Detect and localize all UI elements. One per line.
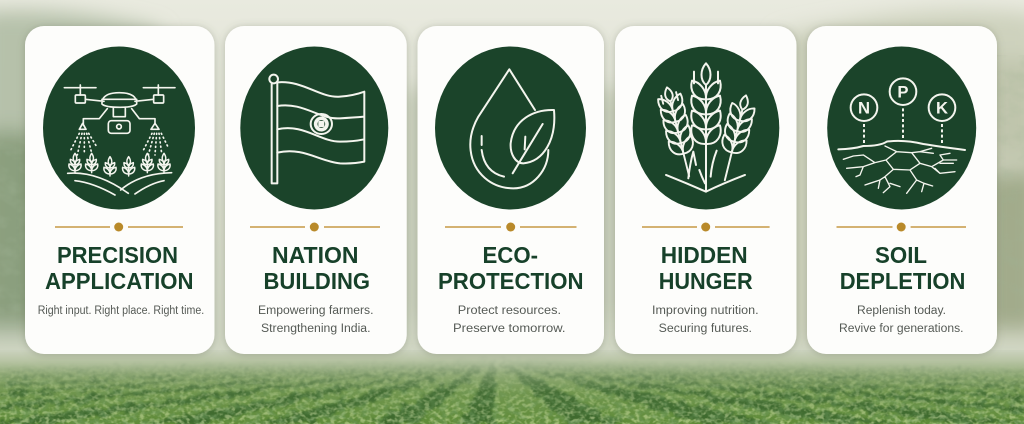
icon: waving Indian flag bbox=[240, 46, 388, 210]
heading: eco-protection: ECO- bbox=[482, 242, 538, 268]
icon: NPK over cracked soil: P bbox=[897, 83, 909, 102]
divider: gold rule and dot bbox=[250, 222, 380, 232]
text: eco tagline bbox=[453, 305, 566, 335]
text: hunger tagline: Improving nutrition. bbox=[652, 305, 759, 317]
icon: wheat stalks bbox=[633, 46, 779, 210]
text: soil tagline: Replenish today. bbox=[857, 305, 946, 317]
heading: precision application: APPLICATION bbox=[45, 268, 194, 294]
icon: NPK over cracked soil: N bbox=[858, 99, 870, 118]
icon: NPK over cracked soil: K bbox=[936, 99, 948, 118]
text: soil tagline: Revive for generations. bbox=[839, 323, 964, 335]
panel: nation building bbox=[225, 26, 407, 354]
panel: eco-protection bbox=[418, 26, 604, 354]
heading: eco-protection bbox=[438, 242, 584, 294]
dark furrows between crop rows bbox=[0, 358, 1024, 424]
divider: gold rule and dot bbox=[836, 222, 966, 232]
heading: eco-protection: PROTECTION bbox=[438, 268, 584, 294]
text: nation tagline: Empowering farmers. bbox=[258, 305, 374, 317]
heading: precision application bbox=[45, 242, 194, 294]
panel: hidden hunger bbox=[615, 26, 796, 354]
divider: gold rule and dot bbox=[642, 222, 770, 232]
heading: nation building: NATION bbox=[272, 242, 358, 268]
heading: precision application: PRECISION bbox=[57, 242, 178, 268]
icon: water drop with leaf bbox=[435, 46, 586, 210]
icon: drone spraying crops bbox=[43, 46, 195, 210]
panel: precision application bbox=[25, 26, 214, 354]
text: eco tagline: Protect resources. bbox=[458, 305, 561, 317]
panel: soil depletion bbox=[807, 26, 997, 354]
divider: gold rule and dot bbox=[445, 222, 576, 232]
text: soil tagline bbox=[839, 305, 964, 335]
text: hunger tagline bbox=[652, 305, 759, 335]
text: nation tagline bbox=[258, 305, 374, 335]
heading: hidden hunger: HUNGER bbox=[659, 268, 753, 294]
heading: hidden hunger bbox=[659, 242, 753, 294]
text: nation tagline: Strengthening India. bbox=[261, 323, 370, 335]
heading: nation building bbox=[264, 242, 370, 294]
divider: gold rule and dot bbox=[55, 222, 183, 232]
text: hunger tagline: Securing futures. bbox=[659, 323, 752, 335]
heading: soil depletion: SOIL bbox=[875, 242, 927, 268]
heading: nation building: BUILDING bbox=[264, 268, 370, 294]
text: precision tagline: Right input. Right place. Right time. bbox=[38, 305, 204, 317]
heading: soil depletion bbox=[840, 242, 965, 294]
heading: soil depletion: DEPLETION bbox=[840, 268, 965, 294]
icon: NPK over cracked soil bbox=[827, 46, 976, 210]
heading: hidden hunger: HIDDEN bbox=[661, 242, 748, 268]
text: eco tagline: Preserve tomorrow. bbox=[453, 323, 566, 335]
